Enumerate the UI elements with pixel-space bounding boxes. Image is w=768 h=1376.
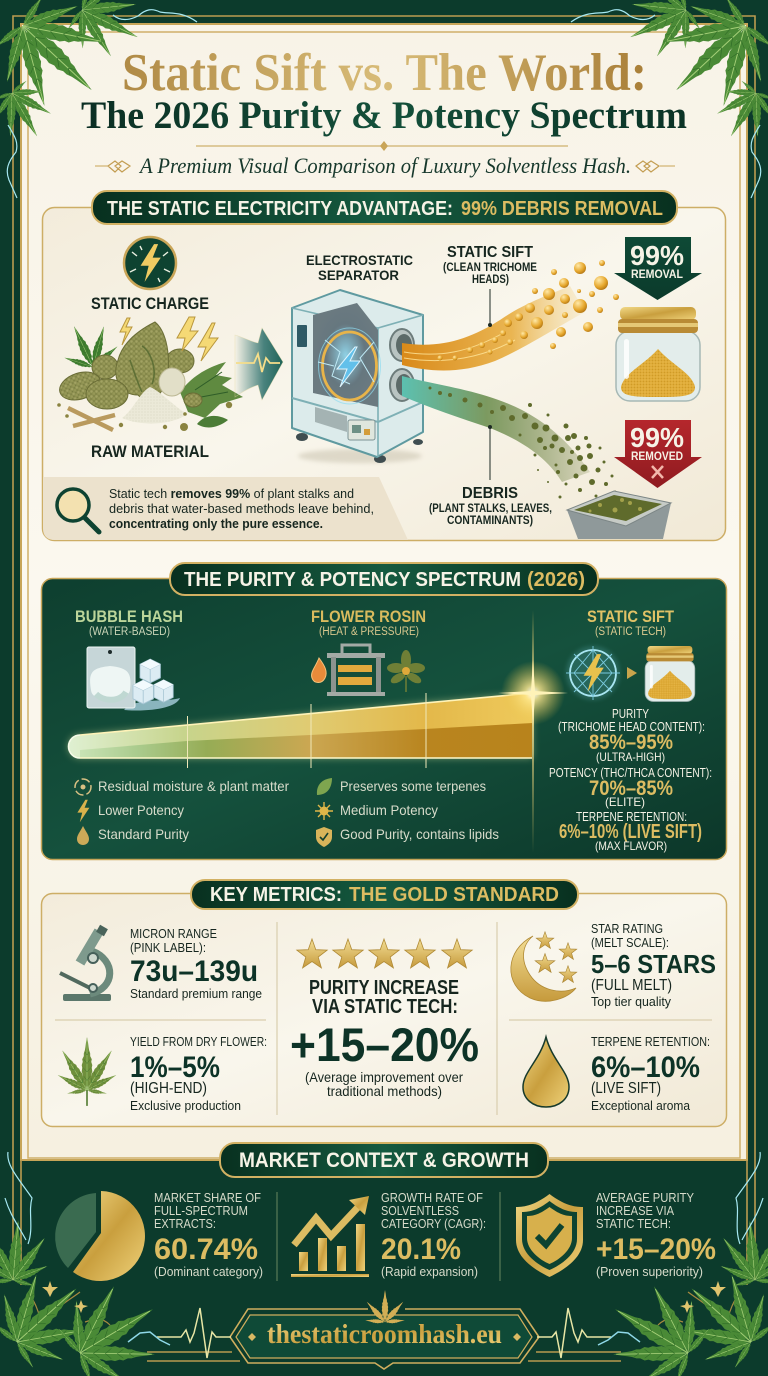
lightning accents [120,317,218,361]
list: flower rosin traits [315,778,499,847]
icon: moisture [75,779,91,795]
main title: The 2026 Purity & Potency Spectrum [81,94,687,137]
icon: static tech to jar [566,646,695,701]
list: flower rosin traits: Preserves some terpenes [340,778,486,794]
list: flower rosin traits: Good Purity, contains lipids [340,826,499,842]
label: electrostatic separator [306,252,413,283]
metric: purity increase: traditional methods) [327,1083,442,1099]
icon: gold jar [616,307,700,401]
label: debris [429,425,552,527]
label: electrostatic separator: ELECTROSTATIC [306,252,413,268]
icon: lightning [77,800,89,822]
heading pill: key metrics: THE GOLD STANDARD [349,884,559,906]
heading pill: market context: MARKET CONTEXT & GROWTH [239,1149,529,1172]
icon: static charge badge [124,237,176,289]
metric: terpene retention: 6%–10% [591,1051,700,1084]
static sift stats: TERPENE RETENTION: [576,810,687,824]
metric: yield from dry flower: (HIGH-END) [130,1080,207,1097]
column header: bubble hash: BUBBLE HASH [75,607,183,626]
metric: terpene retention: TERPENE RETENTION: [591,1035,710,1049]
metric: micron range: Standard premium range [130,987,262,1001]
pie chart: market share [55,1191,145,1281]
footer plaque: thestaticroomhash.eu [267,1319,502,1349]
icon: leaf [317,778,332,795]
label: raw material: RAW MATERIAL [91,443,209,461]
metric: terpene retention [591,1035,710,1113]
metric: purity increase: PURITY INCREASE [309,976,459,999]
label: debris: DEBRIS [462,485,518,502]
leaves: bottom right [590,1217,768,1376]
metric: growth rate: GROWTH RATE OF [381,1191,483,1205]
metric: yield from dry flower [130,1035,267,1113]
label: static sift: HEADS) [472,272,509,286]
panel: static electricity advantage [42,191,726,540]
leaves: top right [614,0,768,151]
electrostatic separator machine [292,290,423,463]
list: bubble hash traits: Residual moisture & plant matter [98,778,289,794]
label: static sift [443,244,537,327]
metric: growth rate: SOLVENTLESS [381,1204,459,1218]
metric: average purity increase: STATIC TECH: [596,1217,671,1231]
list: bubble hash traits: Lower Potency [98,802,184,818]
metric: growth rate: 20.1% [381,1233,461,1266]
static sift stats: PURITY [612,707,650,721]
arrow into separator [235,328,283,400]
callout arrow: 99% removed: 99% [630,422,684,453]
metric: average purity increase: +15–20% [596,1233,716,1266]
powder mound [122,387,188,424]
small leaf [197,416,228,427]
metric: star rating: STAR RATING [591,922,663,936]
metric: yield from dry flower: YIELD FROM DRY FLOWER: [130,1035,267,1049]
icon: sun [315,802,333,820]
metric: average purity increase: (Proven superiority) [596,1264,703,1279]
static sift stats: (ELITE) [605,795,645,809]
column header: flower rosin: (HEAT & PRESSURE) [319,626,419,638]
metric: yield from dry flower: 1%–5% [130,1051,220,1084]
spectrum bar [68,660,568,768]
section: market context and growth [55,1143,716,1281]
heading pill: key metrics: KEY METRICS: [210,884,342,906]
callout: info box: debris that water-based methods leave behind, [109,501,374,516]
heading pill: market context [220,1143,548,1177]
column header: flower rosin: FLOWER ROSIN [311,607,426,626]
icon: moon and stars [511,932,577,1001]
icon: magnifying glass [57,489,99,532]
heading pill: static electricity advantage: THE STATIC ELECTRICITY ADVANTAGE: [107,198,453,220]
list: flower rosin traits: Medium Potency [340,802,438,818]
static sift stats: 6%–10% (LIVE SIFT) [559,821,702,843]
icon: rosin press, flame and flower [312,645,425,696]
metric: terpene retention: (LIVE SIFT) [591,1080,661,1097]
column header: static sift [587,607,675,638]
column header: static sift: (STATIC TECH) [595,626,666,638]
heading pill: spectrum: (2026) [527,569,585,591]
leaves: bottom left [0,1217,178,1376]
heading pill: spectrum: THE PURITY & POTENCY SPECTRUM [184,569,521,591]
callout arrow: 99% removal: REMOVAL [631,267,683,281]
callout arrow: 99% removal [614,237,702,300]
spectrum flare [498,660,568,726]
icon: shield [516,1194,583,1277]
title divider [196,141,568,151]
callout arrow: 99% removed: REMOVED [631,449,683,463]
metric: star rating: Top tier quality [591,995,672,1009]
panel: purity and potency spectrum [42,563,726,860]
buds [92,355,118,379]
metric: purity increase: (Average improvement over [305,1069,463,1085]
static sift stats: POTENCY (THC/THCA CONTENT): [549,766,712,780]
column header: flower rosin [311,607,426,638]
heading pill: static electricity advantage [92,191,677,224]
raw material pile [56,317,243,431]
label: debris: (PLANT STALKS, LEAVES, [429,501,552,515]
static sift stats: (MAX FLAVOR) [595,839,667,853]
icon: footer gold leaf [365,1290,405,1324]
icon: bubble hash bag with ice [87,647,180,710]
static sift stats: 85%–95% [589,731,673,754]
heading pill: key metrics [191,880,578,909]
metric: market share: 60.74% [154,1233,258,1266]
divider: spectrum end line [532,610,534,853]
metric: growth rate: (Rapid expansion) [381,1264,478,1279]
callout: info box: Static tech removes 99% of plant stalks and [109,486,354,501]
metric: purity increase [290,976,479,1099]
metric: micron range: (PINK LABEL): [130,941,206,955]
heading pill: static electricity advantage: 99% DEBRIS REMOVAL [461,198,663,220]
metric: growth rate [381,1191,486,1279]
icon: droplet [77,826,89,845]
metric: terpene retention: Exceptional aroma [591,1099,690,1113]
metric: growth rate: CATEGORY (CAGR): [381,1217,486,1231]
metric: market share: FULL-SPECTRUM [154,1204,248,1218]
icon: growth chart [291,1196,369,1277]
leaves: top left [0,0,154,151]
metric: purity increase: +15–20% [290,1018,479,1071]
metric: star rating: (FULL MELT) [591,977,672,994]
icon: five gold stars [297,939,472,968]
icon: oil droplet [523,1037,569,1107]
metric: yield from dry flower: Exclusive production [130,1099,241,1113]
label: debris: CONTAMINANTS) [447,513,533,527]
metric: micron range [130,927,262,1001]
column header: bubble hash: (WATER-BASED) [89,626,170,638]
static sift stats: (TRICHOME HEAD CONTENT): [558,720,705,734]
metric: average purity increase: INCREASE VIA [596,1204,675,1218]
label: static charge: STATIC CHARGE [91,295,209,313]
static sift stats [549,707,712,853]
footer plaque [147,1309,621,1369]
pulse lines [128,1308,640,1358]
metric: star rating [591,922,716,1009]
callout: info box: concentrating only the pure essence. [109,516,323,531]
list: bubble hash traits: Standard Purity [98,826,189,842]
heading pill: spectrum [170,563,598,595]
metric: purity increase: VIA STATIC TECH: [312,995,458,1018]
metric: market share: (Dominant category) [154,1264,263,1279]
main title: Static Sift vs. The World: [122,44,647,102]
callout: info box [43,477,408,540]
subtitle: A Premium Visual Comparison of Luxury Solventless Hash. [138,153,631,178]
callout arrow: 99% removal: 99% [630,240,684,271]
metric: market share [154,1191,263,1279]
icon: microscope [60,927,111,1001]
metric: star rating: (MELT SCALE): [591,936,669,950]
icon: shield [316,827,332,847]
static sift stats: (ULTRA-HIGH) [596,750,665,764]
icon: cannabis leaf [56,1037,118,1106]
metric: micron range: 73u–139u [130,955,258,988]
metric: market share: MARKET SHARE OF [154,1191,261,1205]
list: bubble hash traits [75,778,289,845]
left leaf [64,324,120,370]
label: electrostatic separator: SEPARATOR [318,267,399,283]
label: static sift: (CLEAN TRICHOME [443,260,537,274]
crossed sticks [68,408,115,430]
panel: key metrics [42,880,726,1126]
metric: average purity increase [596,1191,716,1279]
main title [81,44,687,137]
gold stream: static sift [402,260,619,371]
label: static sift: STATIC SIFT [447,244,533,261]
right fern [180,362,243,418]
metric: star rating: 5–6 STARS [591,949,716,979]
metric: market share: EXTRACTS: [154,1217,216,1231]
callout arrow: 99% removed [614,420,702,488]
static sift stats: 70%–85% [589,777,673,800]
metric: average purity increase: AVERAGE PURITY [596,1191,695,1205]
icon: debris bin [567,491,671,539]
column header: bubble hash [75,607,183,638]
teal debris stream [402,376,616,498]
column header: static sift: STATIC SIFT [587,607,675,626]
metric: micron range: MICRON RANGE [130,927,217,941]
